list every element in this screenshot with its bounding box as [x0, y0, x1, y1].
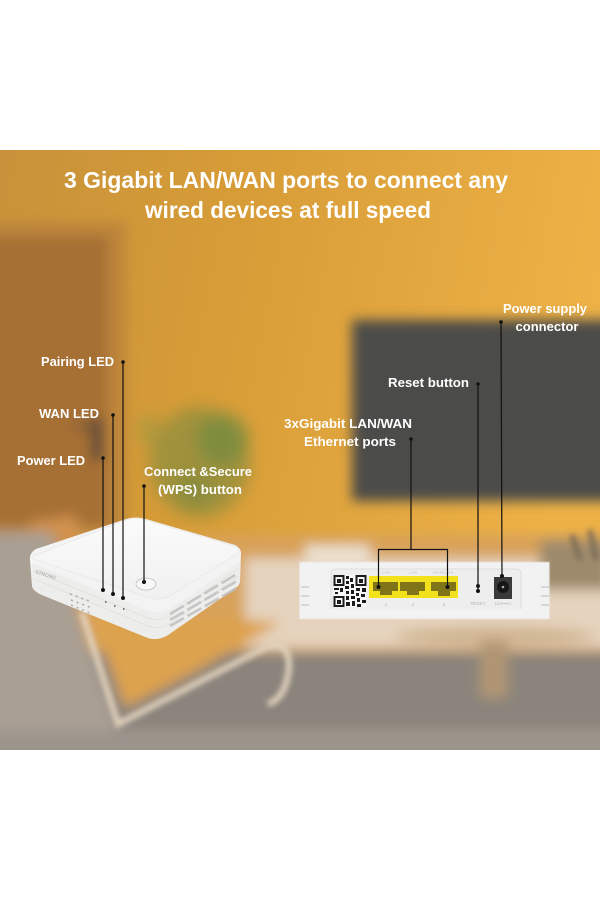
Ethernet ports	[373, 582, 456, 596]
callout: 3x Gigabit LAN/WAN Ethernet ports: 3xGigabit LAN/WAN	[284, 416, 412, 431]
router: top view, front-left device	[30, 518, 241, 639]
router vent holes	[70, 594, 92, 614]
router top face	[33, 518, 239, 599]
callout: 3x Gigabit LAN/WAN Ethernet ports	[284, 416, 450, 589]
port labels: RESET	[470, 601, 486, 606]
port labels: 12V⎓1A	[494, 601, 512, 606]
rear panel recess	[331, 569, 521, 609]
callout: 3x Gigabit LAN/WAN Ethernet ports: Ethernet ports	[304, 434, 396, 449]
port labels: LAN	[409, 570, 417, 575]
callout: Connect & Secure (WPS) button: (WPS) button	[158, 482, 242, 497]
callout: Connect & Secure (WPS) button: Connect &Secure	[144, 464, 252, 479]
callout: Power supply connector	[499, 301, 588, 578]
title	[64, 167, 508, 223]
callout: Power supply connector: Power supply	[503, 301, 588, 316]
plant	[138, 407, 250, 517]
port labels: WAN/LAN	[433, 570, 453, 575]
callout: Power supply connector: connector	[516, 319, 578, 334]
connect button	[136, 578, 156, 590]
callout: Pairing LED: Pairing LED	[41, 354, 114, 369]
background: blurred living room	[0, 150, 600, 762]
port labels: 2	[412, 602, 415, 607]
port labels	[382, 570, 512, 607]
QR code	[333, 575, 366, 607]
router side vents	[170, 574, 237, 626]
LED marks	[105, 601, 124, 610]
router side shading	[32, 562, 240, 639]
router seams	[33, 568, 239, 628]
title: wired devices at full speed	[144, 197, 431, 223]
callout: WAN LED: WAN LED	[39, 406, 99, 421]
callout: Connect & Secure (WPS) button	[142, 464, 252, 584]
callout: Reset button: Reset button	[388, 375, 469, 390]
callout: Power LED	[17, 453, 105, 592]
port labels: LAN	[382, 570, 390, 575]
port labels: 1	[385, 602, 388, 607]
router logo: STRONG	[34, 569, 57, 582]
port labels: 3	[443, 602, 446, 607]
callout: Power LED: Power LED	[17, 453, 85, 468]
title: 3 Gigabit LAN/WAN ports to connect any	[64, 167, 508, 193]
reset hole	[476, 584, 480, 588]
callout: Reset button	[388, 375, 480, 593]
callout: Pairing LED	[41, 354, 125, 600]
router body	[30, 518, 241, 639]
power connector	[494, 577, 512, 599]
rear vents	[301, 587, 549, 605]
router: rear view with ports	[300, 562, 550, 619]
yellow Ethernet port block	[369, 576, 458, 598]
callout: WAN LED	[39, 406, 115, 596]
rear body	[300, 562, 550, 619]
